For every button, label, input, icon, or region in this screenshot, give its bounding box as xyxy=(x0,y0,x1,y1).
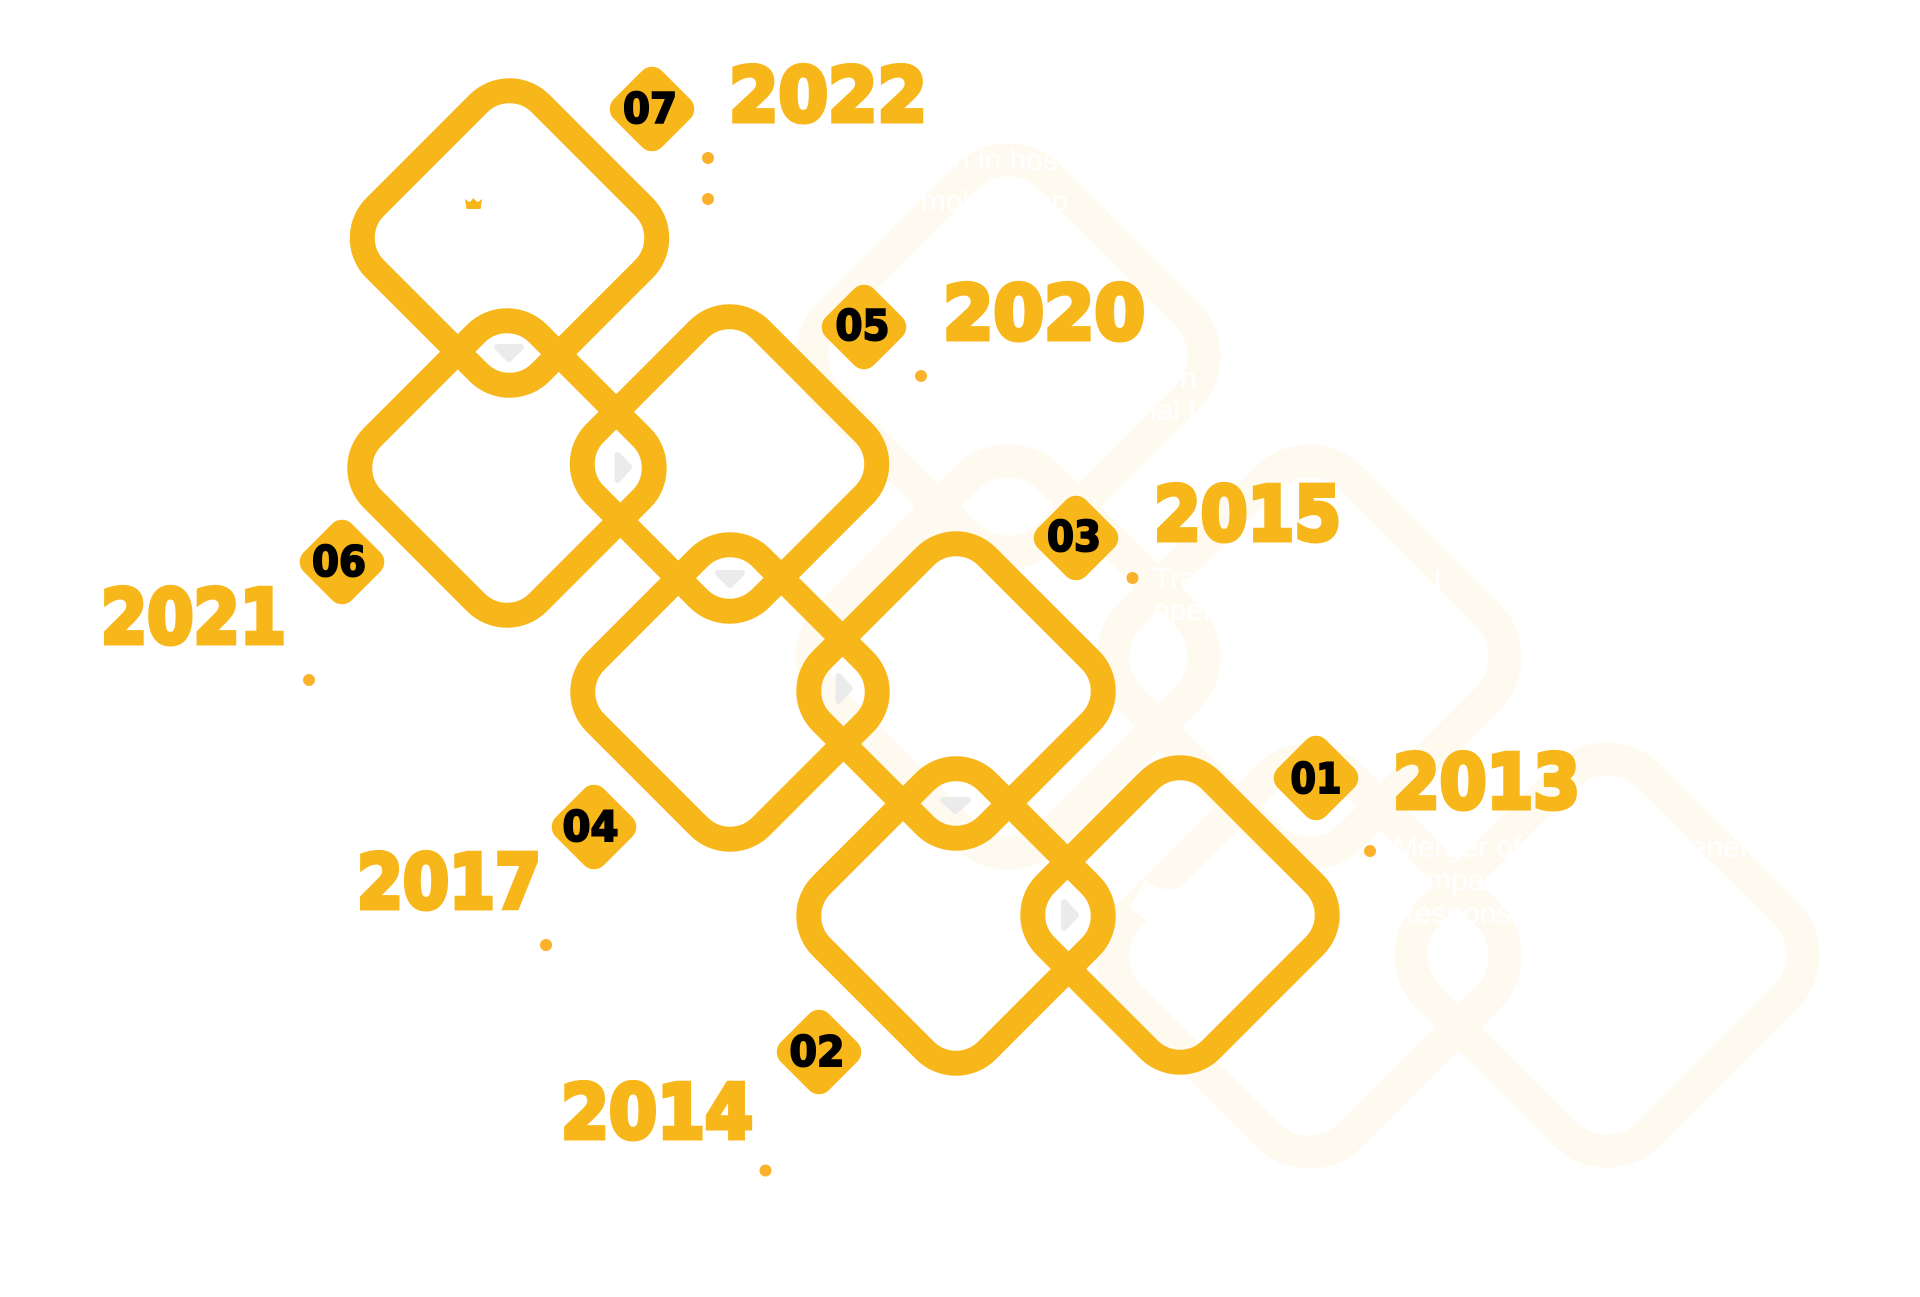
milestone 07 / 2022: 2022 xyxy=(729,51,927,139)
white description text, visible only over the faint diamonds: oper xyxy=(1153,594,1213,627)
white description text, visible only over the faint diamonds xyxy=(921,144,1750,930)
gold chain of rounded diamonds xyxy=(342,73,1345,1081)
gray arrow markers in the lens overlaps xyxy=(497,347,1076,928)
white description text, visible only over the faint diamonds: Respons xyxy=(1393,897,1511,930)
milestone 06 / 2021 xyxy=(101,514,390,686)
milestone 05 / 2020 xyxy=(816,269,1145,382)
white description text, visible only over the faint diamonds: Tra xyxy=(1153,562,1197,595)
milestone 03 / 2015: 2015 xyxy=(1154,470,1341,558)
diamond 05 xyxy=(564,299,895,629)
milestone 04 / 2017 xyxy=(357,779,642,951)
milestone 01 / 2013: 01 xyxy=(1290,754,1342,803)
milestone 04 / 2017: 2017 xyxy=(357,838,541,926)
milestone 06 / 2021: 2021 xyxy=(101,573,286,661)
milestone 05 / 2020: 05 xyxy=(836,301,890,350)
milestone 07 / 2022 xyxy=(604,51,927,205)
white description text, visible only over the faint diamonds: n xyxy=(1180,362,1197,395)
faint background chain of rounded diamonds xyxy=(787,135,1828,1177)
white description text, visible only over the faint diamonds: nal t xyxy=(1140,394,1197,427)
milestone 01 / 2013: 2013 xyxy=(1393,738,1580,826)
diamond 03 xyxy=(791,526,1121,856)
milestone 05 / 2020: 2020 xyxy=(943,269,1145,357)
milestone 01 / 2013 xyxy=(1268,730,1580,857)
white description text, visible only over the faint diamonds: mpa xyxy=(1426,864,1485,897)
diamond 07 xyxy=(344,73,675,403)
milestone 02 / 2014 xyxy=(561,1004,867,1176)
milestone 06 / 2021: 06 xyxy=(312,537,366,586)
white description text, visible only over the faint diamonds: n in hos xyxy=(953,144,1058,177)
milestone 07 / 2022: 07 xyxy=(623,84,677,133)
milestone 03 / 2015 xyxy=(1028,470,1341,586)
milestone 04 / 2017: 04 xyxy=(562,802,618,851)
white description text, visible only over the faint diamonds: Merger of xyxy=(1393,831,1522,864)
milestone 03 / 2015: 03 xyxy=(1047,512,1101,561)
white description text, visible only over the faint diamonds: mobile app xyxy=(921,185,1068,218)
milestone 02 / 2014: 2014 xyxy=(561,1068,753,1156)
diamond 04 xyxy=(565,527,895,857)
white description text, visible only over the faint diamonds: ener xyxy=(1690,831,1750,864)
white description text, visible only over the faint diamonds: t xyxy=(1434,562,1443,595)
diamond 06 xyxy=(342,303,672,633)
diamond 02 xyxy=(791,751,1121,1081)
milestone 02 / 2014: 02 xyxy=(790,1027,844,1076)
icon: crown xyxy=(465,198,482,209)
diamond 01 xyxy=(1015,750,1345,1080)
